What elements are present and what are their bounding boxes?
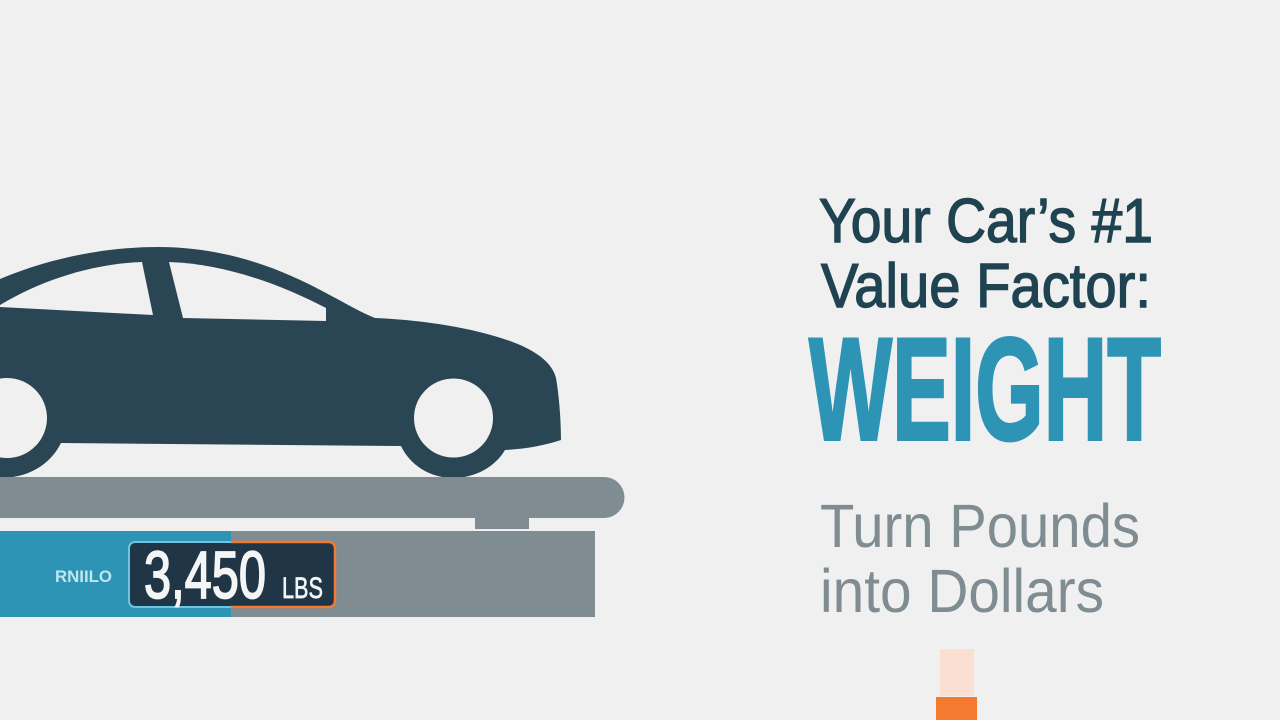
weight display bbox=[129, 538, 335, 613]
subtitle line 2: into Dollars bbox=[820, 557, 1104, 625]
subtitle bbox=[820, 492, 1140, 625]
pale bar segment bbox=[940, 649, 974, 696]
small base label: RNIILO bbox=[55, 567, 112, 586]
title line 2: Value Factor: bbox=[821, 252, 1151, 321]
weight unit: LBS bbox=[282, 572, 323, 605]
rear window bbox=[0, 262, 153, 315]
front window bbox=[169, 262, 326, 321]
subtitle line 1: Turn Pounds bbox=[820, 492, 1140, 560]
blue base section bbox=[0, 531, 231, 617]
rear wheel opening bbox=[0, 378, 47, 458]
scale base bbox=[0, 531, 595, 617]
title bbox=[819, 187, 1153, 321]
front wheel opening bbox=[414, 378, 493, 458]
blue display border bbox=[129, 542, 231, 607]
weight value: 3,450 bbox=[144, 538, 266, 613]
cropped orange bar bbox=[936, 649, 977, 720]
scale platform bbox=[0, 477, 624, 529]
icon: car on scale bbox=[0, 247, 561, 478]
title line 1: Your Car’s #1 bbox=[819, 187, 1153, 256]
car body silhouette bbox=[0, 247, 561, 478]
orange display border bbox=[231, 542, 335, 607]
orange bar segment bbox=[936, 697, 977, 720]
